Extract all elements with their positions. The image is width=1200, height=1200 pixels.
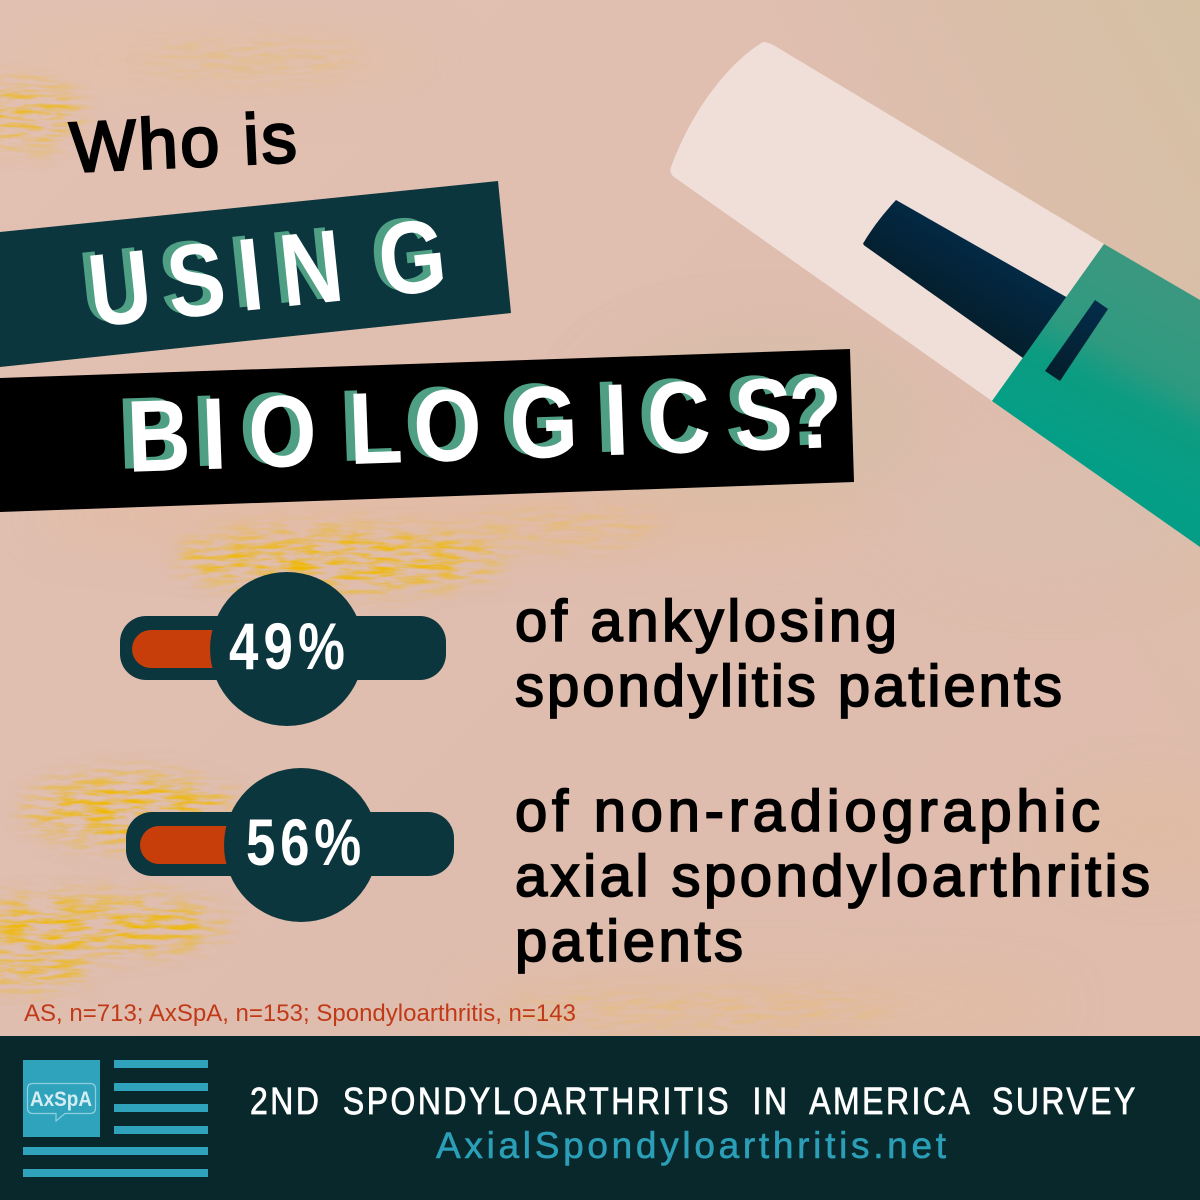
footer title: 2ND SPONDYLOARTHRITIS IN AMERICA SURVEY [250,1080,1135,1123]
stat: 56% gauge [126,768,454,922]
pen body slot [1045,300,1108,381]
stat text: non-radiographic axial spondyloarthritis: axial spondyloarthritis [515,844,1150,909]
heading: Who is: Who is [68,97,298,187]
word shadow: USING: USING [75,195,444,346]
logo text: AxSpA [30,1088,92,1111]
footnote: sample sizes: AS, n=713; AxSpA, n=153; Spondyloarthritis, n=143 [24,1000,576,1027]
stat text: non-radiographic axial spondyloarthritis: of non-radiographic [515,779,1100,844]
stat text: ankylosing spondylitis [515,589,1062,719]
stat text: ankylosing spondylitis: spondylitis patients [515,654,1062,719]
footer band [0,1036,1200,1200]
pen body [992,244,1200,547]
value: 56%: 56% [246,805,361,879]
gauge fill [132,630,220,668]
word: BIOLOGICS?: BIOLOGICS? [125,356,844,494]
stat: 49% gauge [120,572,446,726]
stat text: non-radiographic axial spondyloarthritis [515,779,1150,974]
footer URL: AxialSpondyloarthritis.net [436,1125,947,1166]
pen cap [670,42,1104,401]
value: 49%: 49% [229,609,345,683]
illustration: injector pen [670,42,1200,547]
heading band: USING [0,181,511,367]
logo: AxSpA flag [23,1060,208,1177]
stat text: non-radiographic axial spondyloarthritis: patients [515,909,743,974]
word: USING: USING [83,198,452,349]
word shadow: BIOLOGICS?: BIOLOGICS? [116,353,835,491]
gauge fill [140,826,234,864]
stat text: ankylosing spondylitis: of ankylosing [515,589,897,654]
heading band: BIOLOGICS? [0,349,854,512]
pen viewing window [863,200,1068,358]
